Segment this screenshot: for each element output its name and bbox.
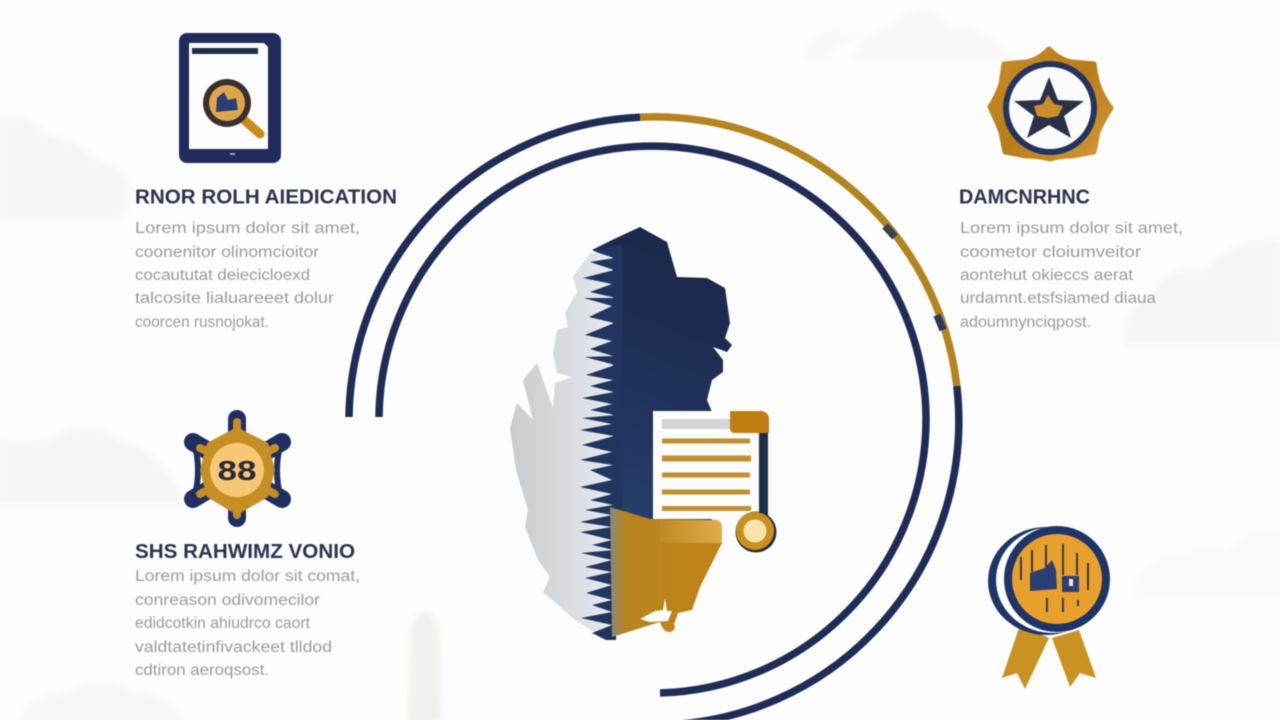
- icon: ribbon medal: [988, 526, 1110, 689]
- icon: gear badge: 88: [218, 455, 256, 486]
- map: orange spot: [663, 622, 675, 632]
- text block: edidcotkin ahiudrco caort: [135, 615, 311, 632]
- text block: cocaututat deiecicloexd: [135, 267, 310, 284]
- seal: [736, 512, 776, 552]
- text block: conreason odivomecilor: [135, 592, 320, 609]
- map: gold lower section: [610, 507, 722, 637]
- text block: cdtiron aeroqsost.: [135, 662, 269, 679]
- panel: bottom left: [135, 419, 360, 679]
- document: header bar: [662, 419, 732, 429]
- text block: urdamnt.etsfsiamed diaua: [960, 290, 1156, 307]
- map: jagged spikes: [580, 245, 622, 640]
- central map illustration: [510, 227, 776, 640]
- medal marks: [1021, 544, 1088, 612]
- text block: [135, 220, 360, 331]
- heading: SHS RAHWIMZ VONIO: [135, 541, 355, 563]
- icon: gear badge: [193, 419, 282, 518]
- text block: Lorem ipsum dolor sit amet,: [135, 220, 360, 237]
- map: navy half: [592, 227, 732, 530]
- icon: star badge: [990, 49, 1111, 159]
- heading: RNOR ROLH AIEDICATION: [135, 186, 397, 208]
- icon: tablet with magnifier: [179, 33, 281, 163]
- heading: DAMCNRHNC: [959, 186, 1090, 208]
- text block: Lorem ipsum dolor sit amet,: [960, 220, 1183, 237]
- document: text lines: [662, 438, 751, 511]
- ring: outer arc: [349, 117, 959, 720]
- document: navy edge: [759, 428, 768, 516]
- map: gold band: [660, 520, 722, 543]
- text block: valdtatetinfivackeet tlldod: [135, 639, 332, 656]
- text block: coonenitor olinomcioitor: [135, 244, 319, 261]
- text block: adoumnynciqpost.: [960, 314, 1091, 331]
- text block: coometor cloiumveitor: [960, 244, 1141, 261]
- medal disc: [988, 527, 1104, 635]
- text block: coorcen rusnojokat.: [135, 314, 269, 331]
- map: white mark: [640, 598, 672, 622]
- ribbon tails: [1002, 625, 1049, 689]
- document: [653, 411, 769, 519]
- text block: Lorem ipsum dolor sit comat,: [135, 568, 360, 585]
- panel: top left: [135, 33, 397, 331]
- text block: aontehut okieccs aerat: [960, 267, 1134, 284]
- text block: [960, 220, 1183, 331]
- document: gold tab: [730, 411, 769, 433]
- panel: top right: [959, 49, 1183, 331]
- text block: talcosite lialuareeet dolur: [135, 290, 334, 307]
- text block: [135, 568, 360, 679]
- ring: inner arc: [379, 146, 926, 693]
- map: grey half: [510, 253, 616, 640]
